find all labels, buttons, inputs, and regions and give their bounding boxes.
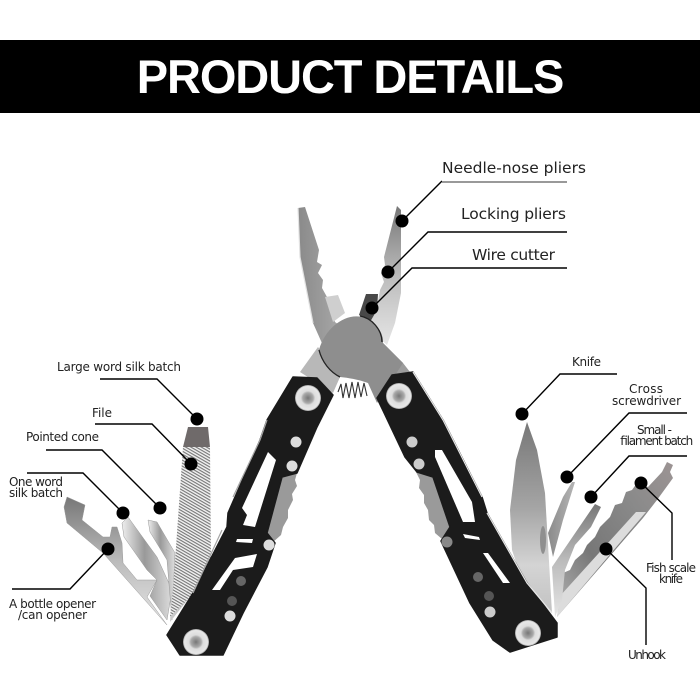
right cutter [359, 294, 378, 322]
rivets [406, 436, 496, 618]
right handle [377, 372, 557, 652]
callout: bottle opener [9, 542, 114, 622]
handle edge highlight [193, 420, 267, 593]
title: PRODUCT DETAILS [137, 50, 563, 103]
lower window [212, 554, 257, 590]
callout: small filament batch: filament batch [620, 434, 693, 448]
callout: small filament batch [584, 423, 693, 504]
fish scale knife [557, 462, 673, 617]
pivot screw [386, 383, 412, 409]
left tang [300, 347, 340, 393]
right tang [378, 343, 410, 398]
callout: wire cutter: Wire cutter [472, 246, 556, 264]
knife thumb groove [540, 526, 546, 554]
callout: large word silk batch: Large word silk batch [57, 360, 181, 374]
left jaw [298, 207, 360, 375]
callout: knife [516, 355, 617, 420]
pliers head [298, 206, 410, 403]
title [0, 40, 700, 113]
window sliver [463, 534, 480, 540]
file [170, 447, 211, 617]
window sliver [236, 539, 253, 543]
knife underside [557, 512, 646, 617]
callout: knife: Knife [572, 355, 601, 369]
knife blade [510, 422, 552, 613]
small filament driver [552, 504, 601, 617]
callout: needle-nose pliers: Needle-nose pliers [442, 159, 586, 177]
callout: one word silk batch: One word [9, 475, 63, 489]
bottle opener [64, 497, 167, 625]
bottom screw [183, 629, 209, 655]
one word screwdriver [122, 517, 172, 620]
window [435, 450, 475, 522]
callout: fish scale knife: knife [659, 572, 683, 586]
callout: bottle opener: /can opener [18, 608, 87, 622]
pointed cone [148, 520, 175, 620]
callout: fish scale knife [634, 476, 696, 586]
left jaw edge [298, 208, 313, 323]
callout: small filament batch: Small - [637, 423, 672, 437]
callout: large word silk batch [57, 360, 204, 426]
cross screwdriver [548, 482, 575, 557]
disc rim [319, 316, 382, 377]
callout: file: File [92, 406, 112, 420]
left cutter [325, 295, 345, 322]
callout: cross screwdriver: Cross [629, 382, 663, 396]
serrated blade [415, 470, 450, 539]
callout: pointed cone: Pointed cone [26, 430, 99, 444]
pivot disc [319, 316, 403, 403]
callout: cross screwdriver: screwdriver [612, 394, 681, 408]
rivets [224, 436, 302, 622]
callout: locking pliers [382, 205, 567, 278]
callout: wire cutter [366, 246, 567, 314]
right fold-out tools [510, 422, 673, 617]
handle body [167, 377, 333, 655]
callout: unhook [600, 542, 666, 662]
left fold-out tools [64, 427, 211, 625]
callout: one word silk batch [9, 473, 130, 520]
right jaw [365, 206, 401, 345]
callout: locking pliers: Locking pliers [461, 205, 566, 223]
pivot screw [295, 385, 321, 411]
multi-tool [64, 206, 673, 655]
serrated blade [266, 473, 297, 543]
callout: bottle opener: A bottle opener [9, 597, 96, 611]
callout: unhook: Unhook [628, 648, 666, 662]
callout: pointed cone [26, 430, 166, 514]
window [242, 452, 276, 527]
handle body [377, 372, 557, 652]
handle edge highlight [413, 372, 552, 613]
file base [170, 588, 197, 622]
callout: needle-nose pliers [396, 159, 586, 228]
callout: file [92, 406, 198, 470]
file head [183, 427, 210, 447]
spring [338, 382, 367, 398]
left handle [167, 377, 333, 655]
callout: one word silk batch: silk batch [9, 486, 63, 500]
bottom screw [515, 620, 541, 646]
lower window [483, 553, 510, 583]
callout: cross screwdriver [560, 382, 687, 484]
callout: fish scale knife: Fish scale [646, 561, 696, 575]
